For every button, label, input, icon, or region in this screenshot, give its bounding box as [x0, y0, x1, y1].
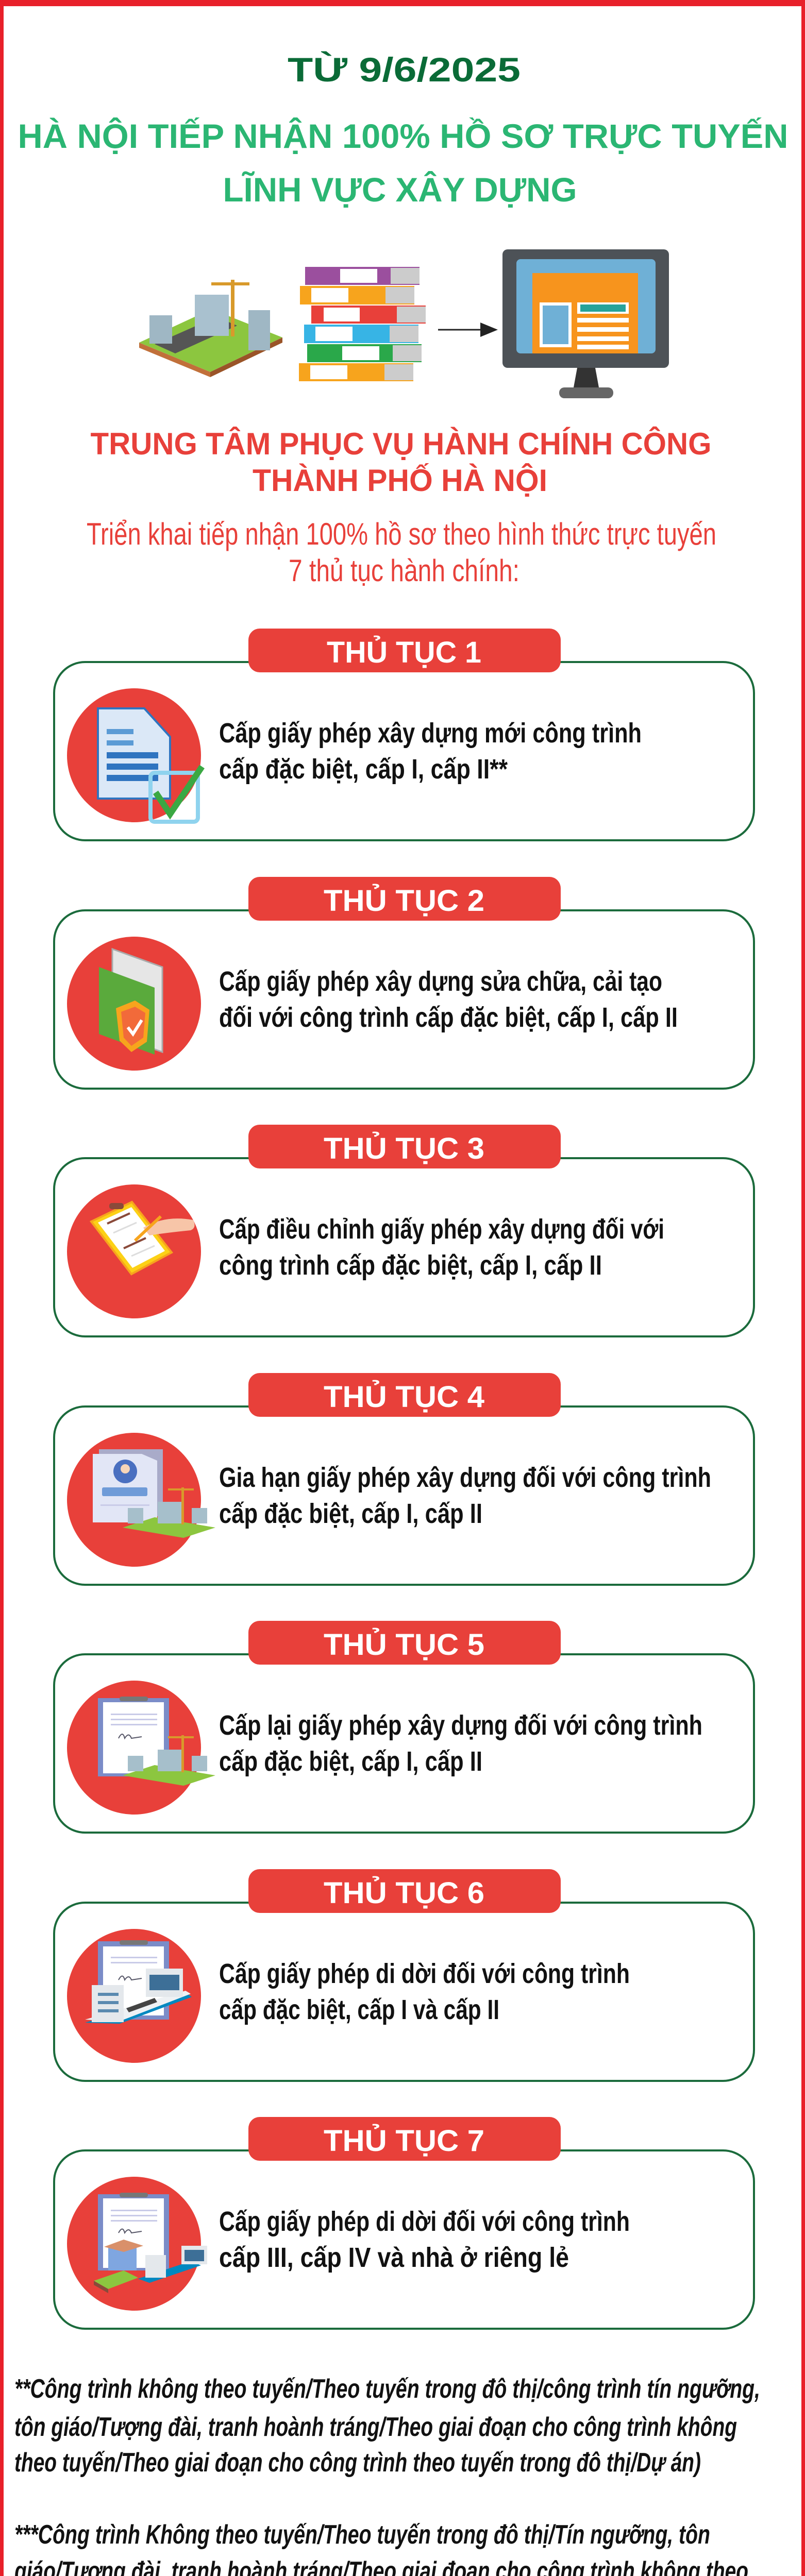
subtitle: 7 thủ tục hành chính: — [289, 553, 519, 588]
title: main heading: LĨNH VỰC XÂY DỰNG — [223, 171, 577, 209]
banner: thủ tục 6 — [248, 1869, 561, 1913]
icon: clipboard with hand — [67, 1184, 201, 1318]
text: procedure 2 — [219, 966, 678, 1033]
panel: thủ tục 2 — [54, 877, 754, 1089]
text: procedure 4 — [219, 1462, 711, 1529]
text: procedure 1: Cấp giấy phép xây dựng mới công trình — [219, 718, 642, 749]
title: main heading: HÀ NỘI TIẾP NHẬN 100% HỒ SƠ TRỰC TUYẾN — [18, 117, 789, 155]
text: procedure 3: Cấp điều chỉnh giấy phép xây dựng đối với — [219, 1214, 664, 1245]
panel: thủ tục 4 — [54, 1373, 754, 1585]
footnote: *** — [14, 2520, 748, 2576]
banner: thủ tục 2: THỦ TỤC 2 — [324, 884, 484, 918]
arrow — [438, 323, 498, 337]
icon: document with check — [67, 688, 202, 822]
banner: thủ tục 2 — [248, 877, 561, 921]
panel: thủ tục 7 — [54, 2117, 754, 2329]
panel: thủ tục 6 — [54, 1869, 754, 2081]
title: date: TỪ 9/6/2025 — [288, 50, 521, 89]
banner: thủ tục 3: THỦ TỤC 3 — [324, 1132, 484, 1165]
illustration: construction site — [139, 280, 282, 377]
illustration: binders — [299, 267, 426, 381]
heading: service center: THÀNH PHỐ HÀ NỘI — [253, 463, 547, 498]
text: procedure 1: cấp đặc biệt, cấp I, cấp II** — [219, 754, 508, 785]
banner: thủ tục 1 — [248, 629, 561, 672]
subtitle — [87, 517, 716, 588]
panel: thủ tục 1 — [54, 629, 754, 840]
footnote: ** — [14, 2374, 760, 2478]
text: procedure 3: công trình cấp đặc biệt, cấp I, cấp II — [219, 1250, 602, 1281]
banner: thủ tục 4: THỦ TỤC 4 — [324, 1380, 484, 1414]
banner: thủ tục 4 — [248, 1373, 561, 1417]
banner: thủ tục 5 — [248, 1621, 561, 1665]
text: procedure 2: Cấp giấy phép xây dựng sửa chữa, cải tạo — [219, 966, 662, 997]
text: procedure 5: cấp đặc biệt, cấp I, cấp II — [219, 1746, 482, 1777]
icon: folder with shield — [67, 937, 201, 1071]
banner: thủ tục 5: THỦ TỤC 5 — [324, 1628, 484, 1662]
icon: certificate with city — [67, 1433, 215, 1567]
title: main heading — [18, 117, 789, 209]
icon: clipboard with office buildings — [67, 1929, 201, 2063]
text: procedure 6: Cấp giấy phép di dời đối với công trình — [219, 1958, 630, 1989]
text: procedure 6 — [219, 1958, 630, 2025]
banner: thủ tục 1: THỦ TỤC 1 — [327, 636, 481, 669]
text: procedure 1 — [219, 718, 642, 785]
icon: clipboard with city — [67, 1681, 215, 1815]
heading: service center — [91, 427, 711, 498]
banner: thủ tục 6: THỦ TỤC 6 — [324, 1876, 484, 1910]
icon: clipboard with house and buildings — [67, 2177, 207, 2311]
text: procedure 7 — [219, 2206, 630, 2273]
banner: thủ tục 7: THỦ TỤC 7 — [324, 2124, 484, 2158]
text: procedure 4: cấp đặc biệt, cấp I, cấp II — [219, 1498, 482, 1529]
text: procedure 2: đối với công trình cấp đặc biệt, cấp I, cấp II — [219, 1002, 678, 1033]
text: procedure 7: Cấp giấy phép di dời đối với công trình — [219, 2206, 630, 2237]
banner: thủ tục 3 — [248, 1125, 561, 1168]
heading: service center: TRUNG TÂM PHỤC VỤ HÀNH CHÍNH CÔNG — [91, 427, 711, 461]
panel: thủ tục 3 — [54, 1125, 754, 1336]
text: procedure 6: cấp đặc biệt, cấp I và cấp II — [219, 1994, 499, 2025]
text: procedure 3 — [219, 1214, 664, 1281]
text: procedure 5 — [219, 1710, 702, 1777]
panel: thủ tục 5 — [54, 1621, 754, 1833]
banner: thủ tục 7 — [248, 2117, 561, 2161]
illustration: computer monitor — [502, 249, 669, 398]
text: procedure 7: cấp III, cấp IV và nhà ở riêng lẻ — [219, 2242, 569, 2273]
